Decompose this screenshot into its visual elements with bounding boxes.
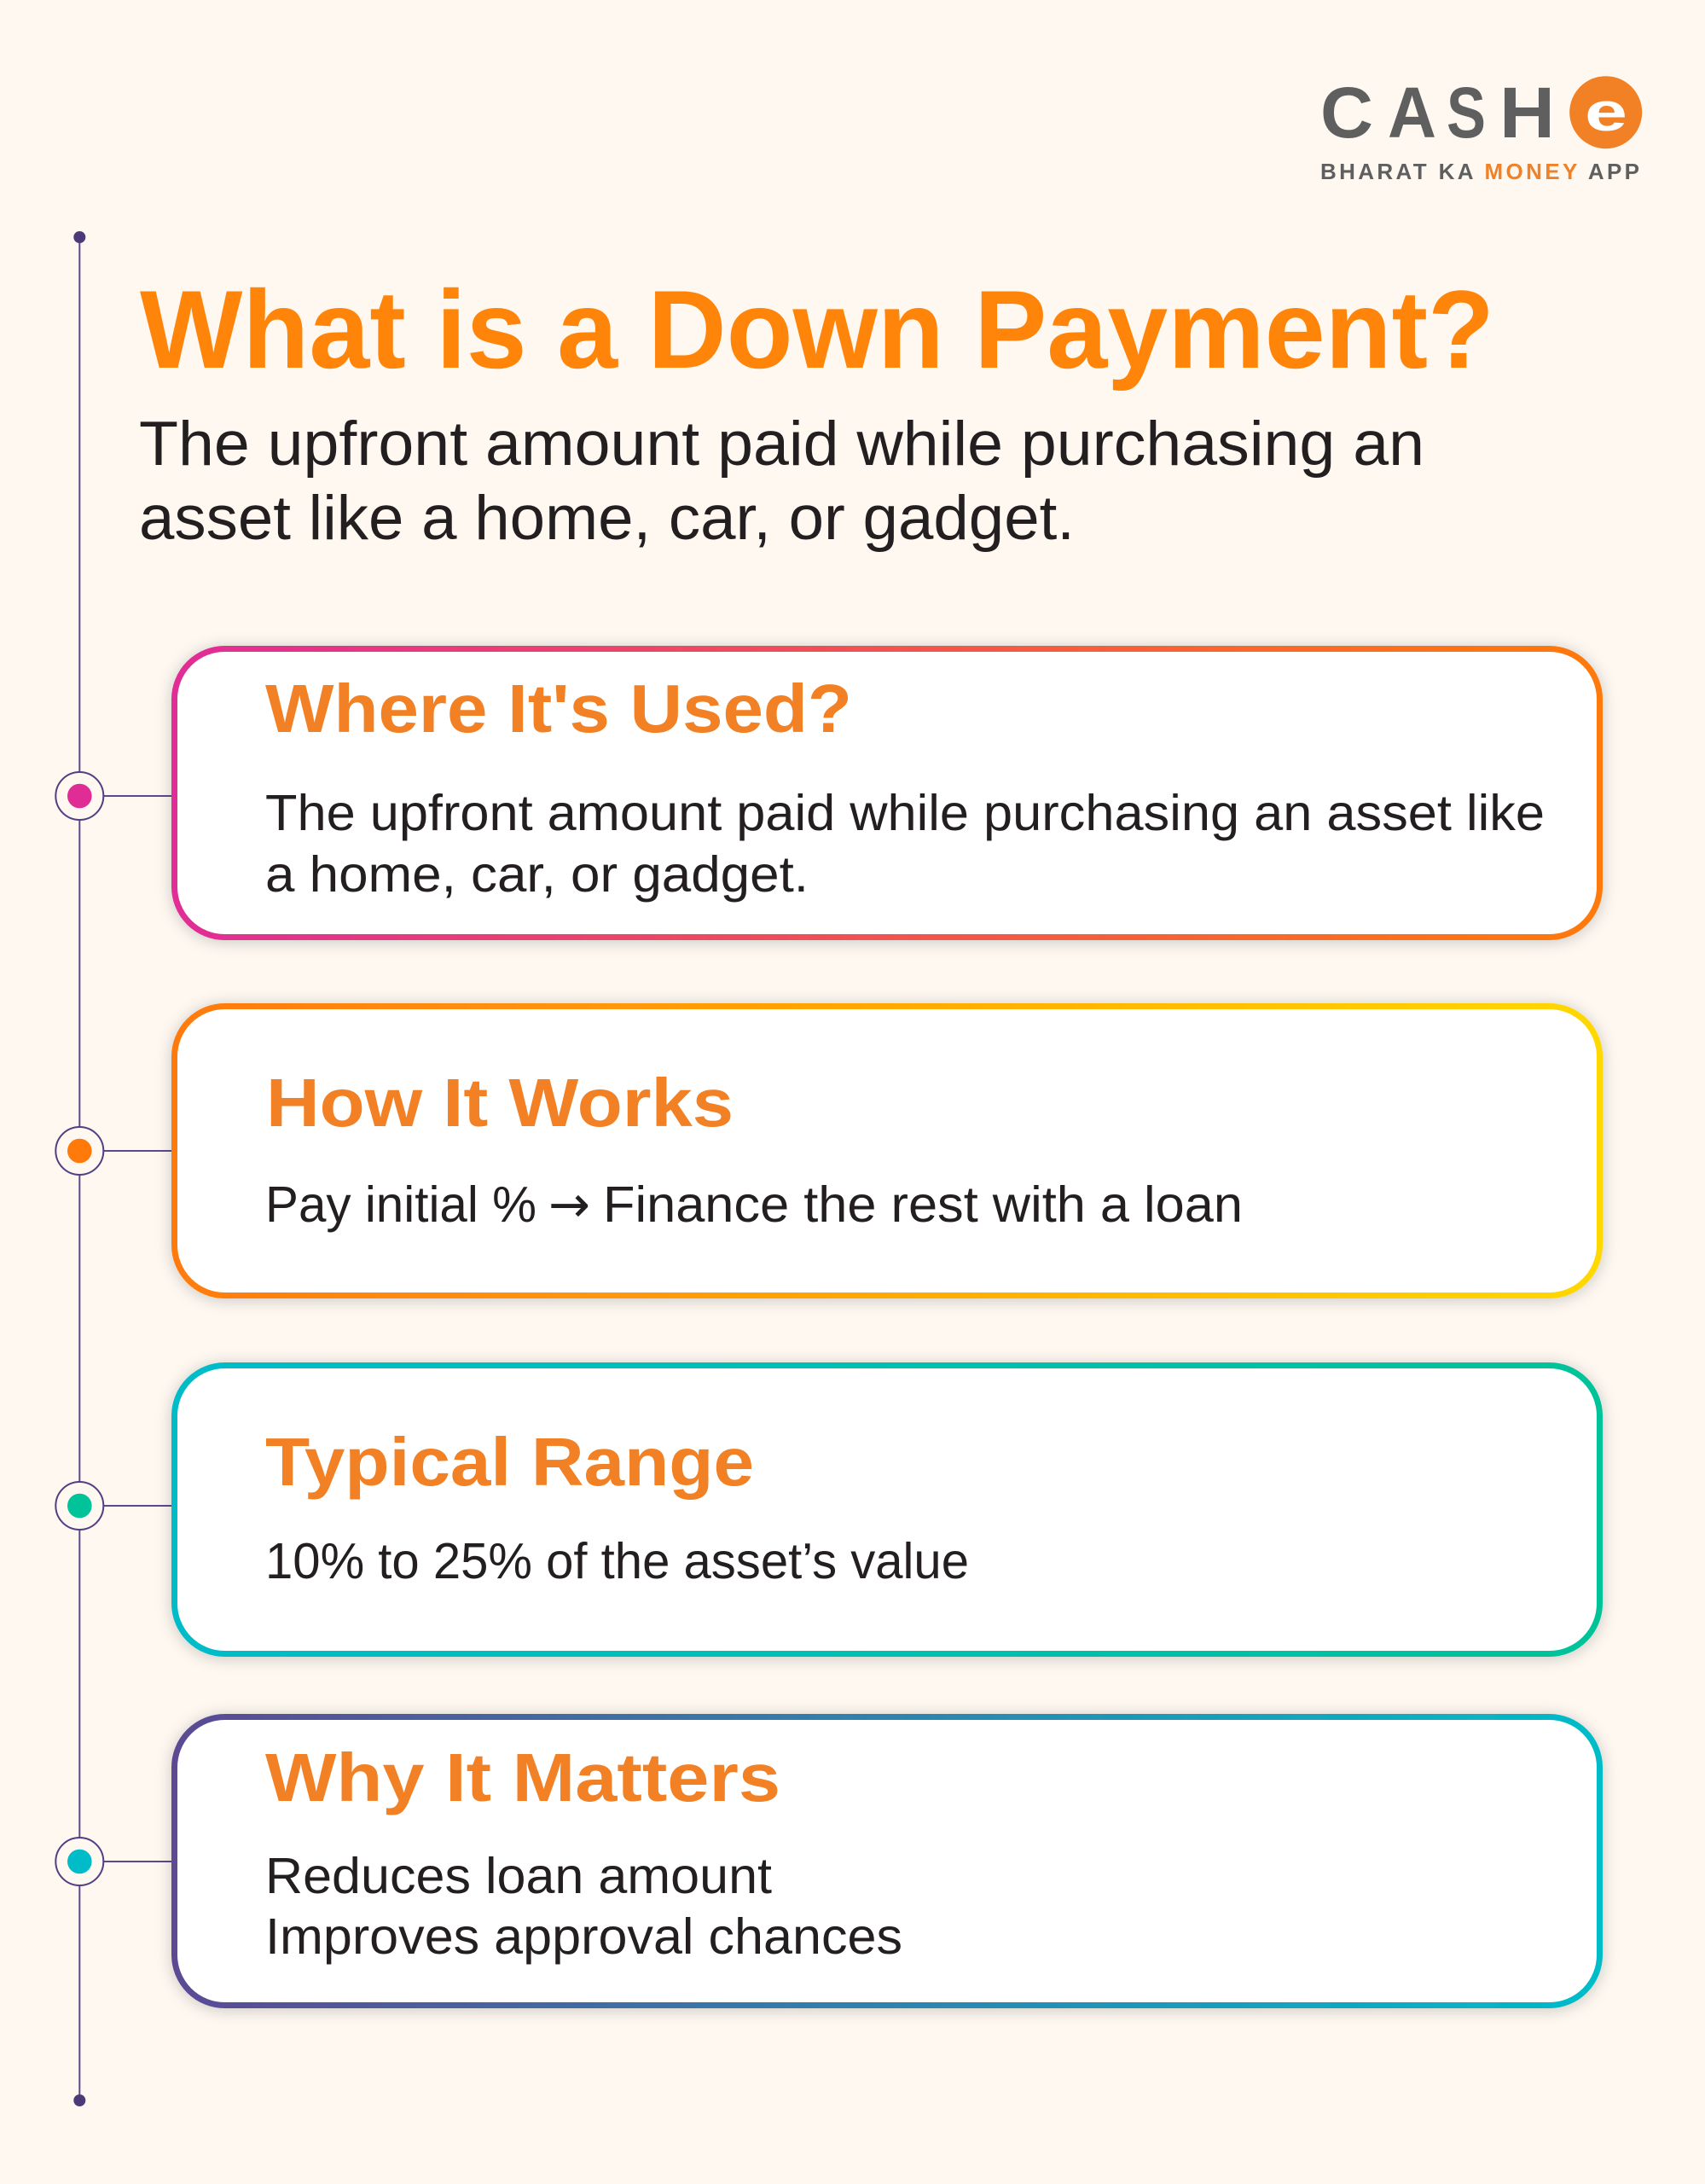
heading: Typical Range — [265, 1424, 754, 1500]
body text: Finance the rest with a loan — [603, 1176, 1243, 1233]
body text: Pay initial % — [265, 1176, 536, 1233]
logo: CASHe — [1320, 73, 1642, 184]
arrow: → — [548, 1175, 590, 1234]
subtitle: asset like a home, car, or gadget. — [139, 484, 1075, 553]
logo wordmark: H — [1499, 73, 1555, 153]
body text — [265, 1175, 1243, 1234]
heading: How It Works — [266, 1065, 734, 1141]
body text: a home, car, or gadget. — [265, 846, 809, 903]
subtitle: The upfront amount paid while purchasing an — [139, 410, 1424, 479]
timeline — [73, 231, 85, 2106]
panel: how it works — [55, 1007, 1599, 1295]
panel: typical range — [55, 1365, 1599, 1653]
title: What is a Down Payment? — [140, 267, 1494, 392]
body text — [265, 785, 1545, 903]
heading: Why It Matters — [265, 1740, 780, 1815]
panel: why it matters — [55, 1716, 1599, 2005]
card frame — [174, 1716, 1600, 2005]
heading: Where It's Used? — [265, 671, 852, 746]
card frame — [174, 1007, 1600, 1295]
timeline node 1 — [55, 772, 175, 820]
timeline node 2 — [55, 1127, 175, 1175]
body text — [265, 1848, 902, 1965]
card frame — [174, 648, 1600, 937]
logo wordmark: C — [1320, 73, 1373, 153]
body text: 10% to 25% of the asset’s value — [265, 1533, 969, 1589]
logo wordmark: A — [1388, 73, 1436, 153]
panel: where it's used — [55, 648, 1599, 937]
icon: orange e badge — [1569, 76, 1642, 148]
timeline node 4 — [55, 1838, 175, 1885]
card frame — [174, 1365, 1600, 1653]
body text: The upfront amount paid while purchasing an asset like — [265, 785, 1545, 841]
logo wordmark: S — [1447, 73, 1486, 153]
logo wordmark — [1320, 73, 1555, 153]
timeline node 3 — [55, 1482, 175, 1530]
body text: Reduces loan amount — [265, 1848, 772, 1904]
icon: orange e badge: e — [1585, 81, 1627, 142]
subtitle — [139, 410, 1424, 553]
logo tagline: BHARAT KA MONEY APP — [1320, 159, 1639, 184]
body text: Improves approval chances — [265, 1908, 902, 1965]
